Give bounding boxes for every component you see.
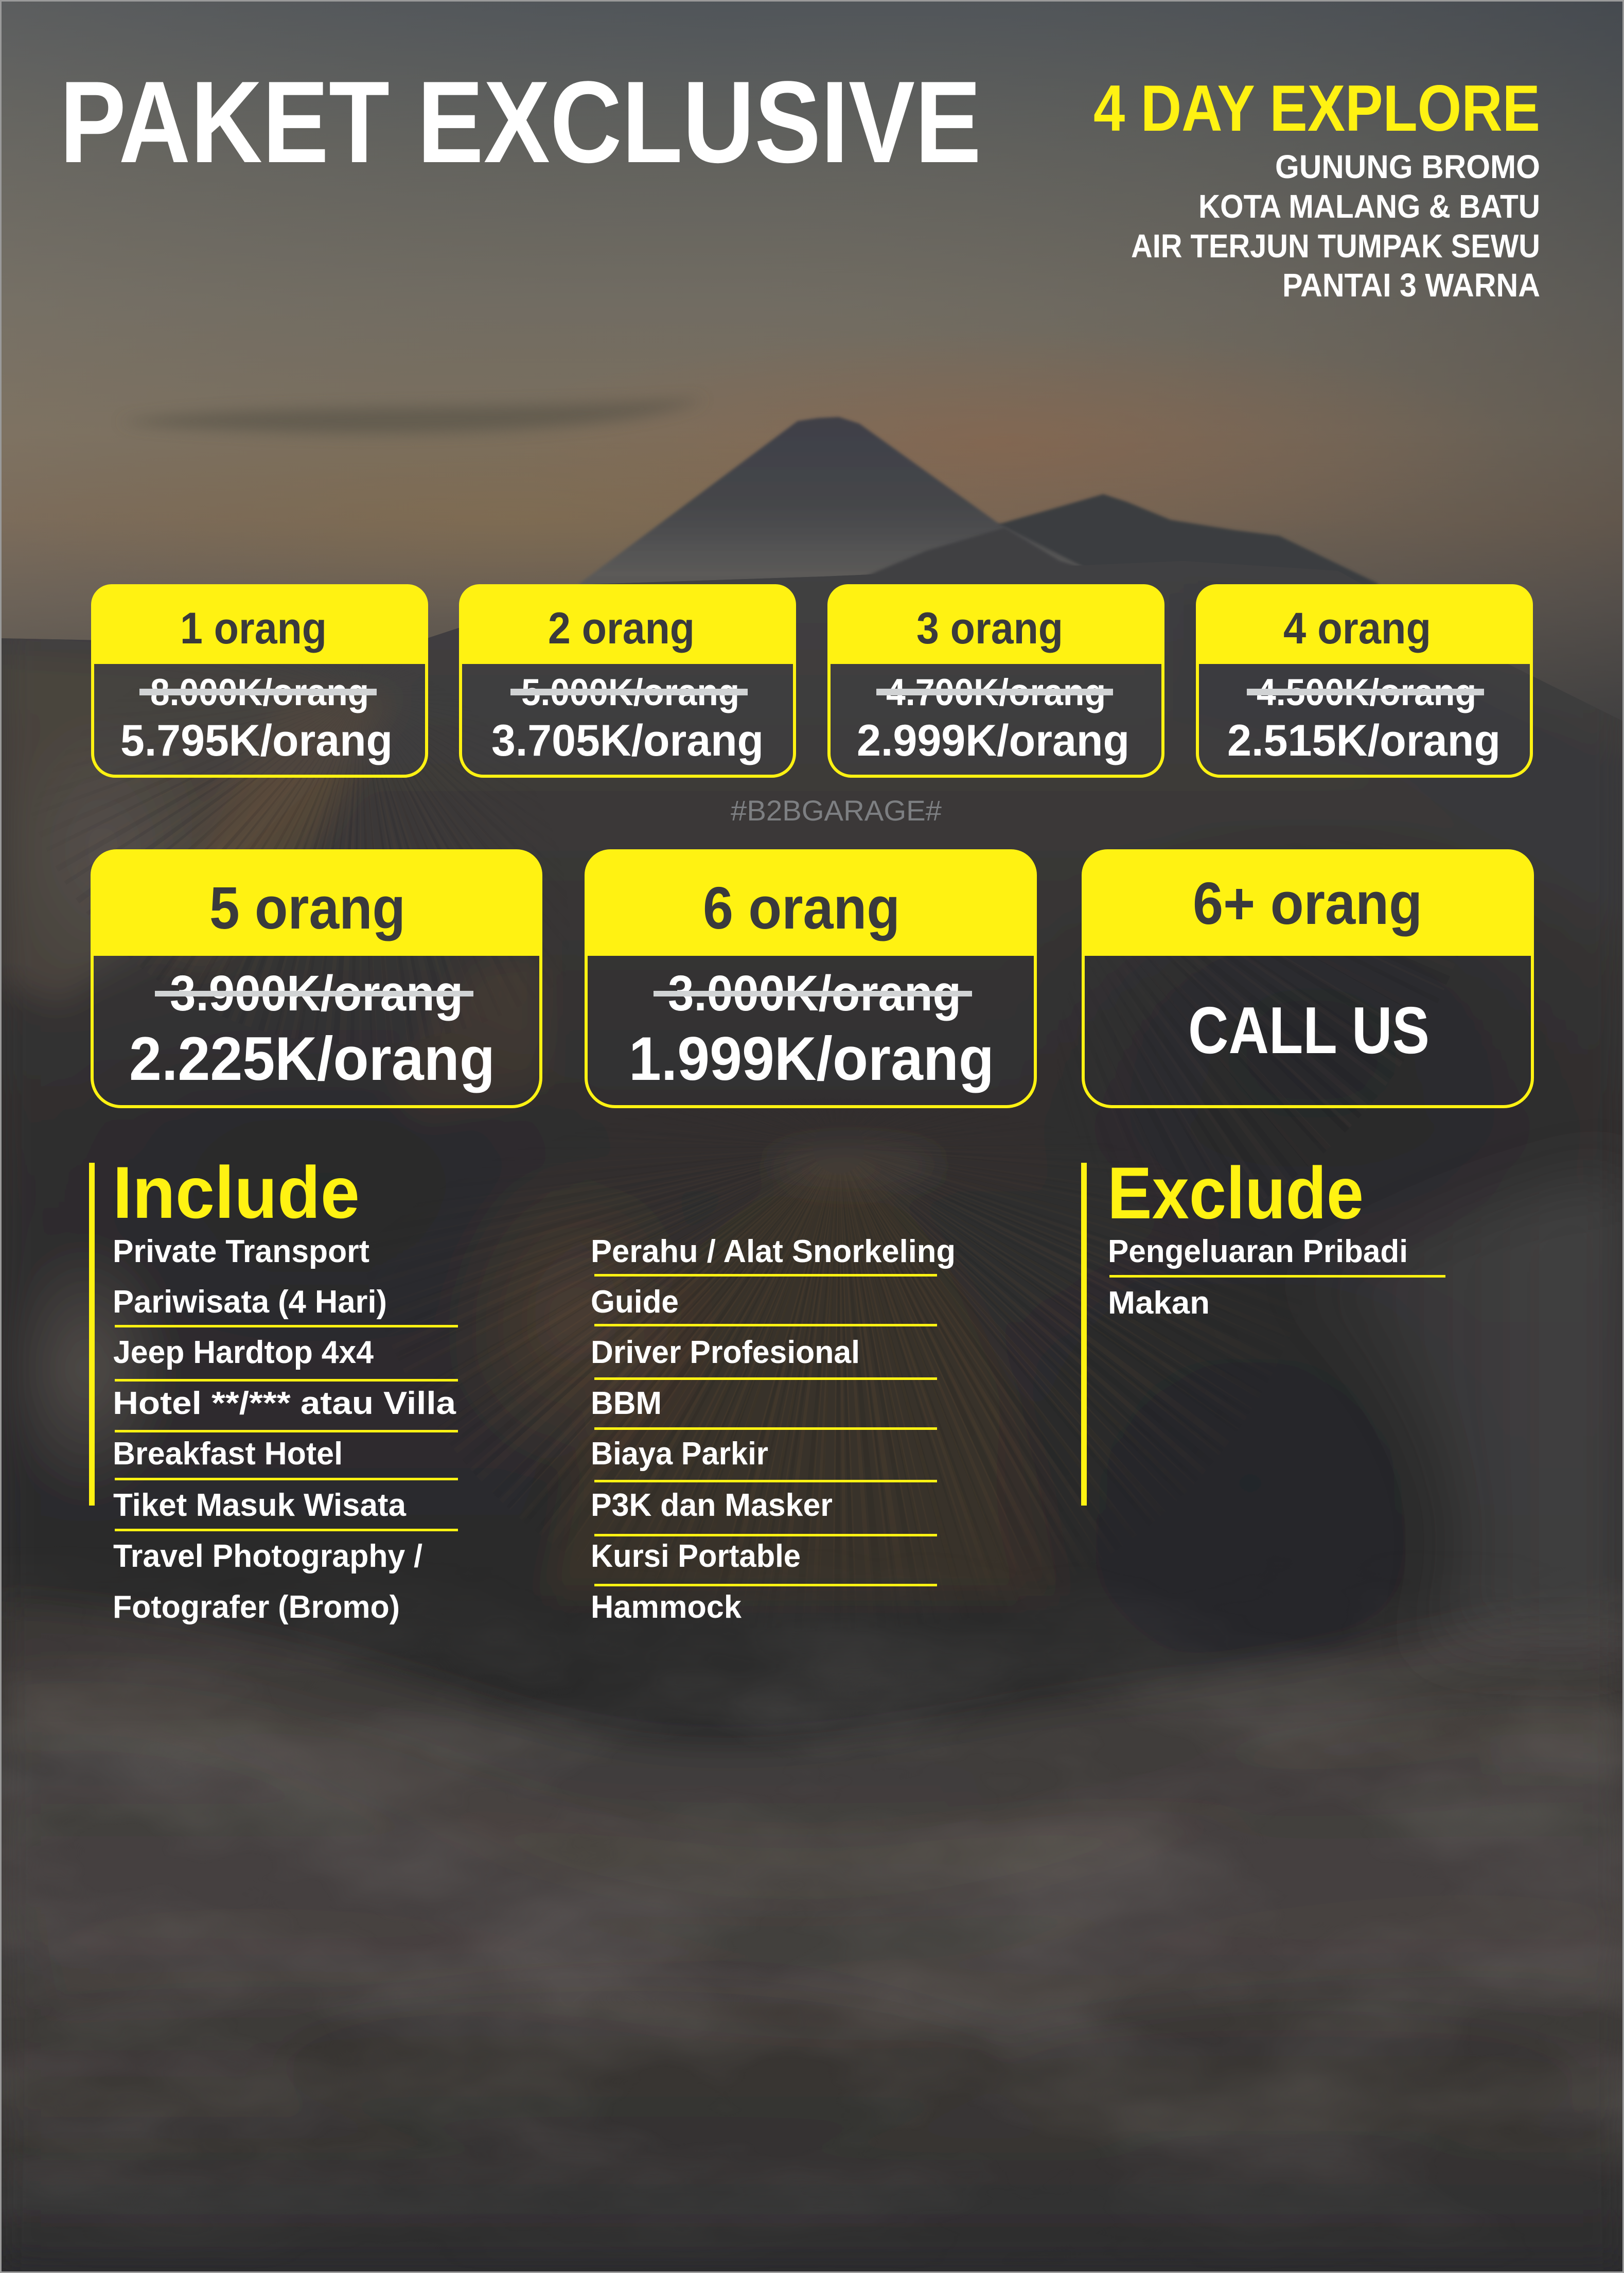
include list column 1: Jeep Hardtop 4x4 — [113, 1335, 374, 1370]
price card: 2 orang — [459, 584, 796, 776]
price card: 6 orang: 6 orang — [703, 875, 900, 941]
include list column 2: Hammock — [591, 1589, 742, 1625]
price card: 2 orang: 2 orang — [548, 604, 695, 653]
include list column 1 — [113, 1234, 458, 1625]
price card: 3 orang: 3 orang — [916, 604, 1063, 653]
include list column 1: Fotografer (Bromo) — [113, 1589, 400, 1625]
price card: 4 orang: 2.515K/orang — [1227, 716, 1501, 765]
price card: 1 orang: 8.000K/orang — [150, 672, 369, 713]
price card: 4 orang: 4 orang — [1283, 604, 1431, 653]
price card: 2 orang: 5.000K/orang — [521, 672, 739, 713]
include list column 1: Travel Photography / — [113, 1538, 422, 1574]
include list column 2: Biaya Parkir — [591, 1436, 768, 1472]
destination: Pantai 3 Warna: PANTAI 3 WARNA — [1282, 267, 1540, 304]
price card: 4 orang — [1196, 584, 1533, 776]
exclude list: Pengeluaran Pribadi — [1108, 1234, 1408, 1269]
price card: 1 orang: 1 orang — [180, 604, 327, 653]
include list column 1: Hotel **/*** atau Villa — [113, 1386, 456, 1421]
price card: 5 orang — [91, 849, 542, 1107]
include list column 2: BBM — [591, 1386, 662, 1421]
price card: 1 orang — [91, 584, 428, 776]
exclude list: Makan — [1108, 1285, 1210, 1321]
price card: 6 orang: 3.000K/orang — [668, 965, 961, 1021]
price card: 5 orang: 3.900K/orang — [170, 965, 463, 1021]
include list column 2: P3K dan Masker — [591, 1488, 833, 1523]
exclude list — [1108, 1234, 1445, 1321]
price card: 6+ orang: CALL US — [1188, 993, 1429, 1068]
price card: 4 orang: 4.500K/orang — [1257, 672, 1476, 713]
include list column 1: Private Transport — [113, 1234, 369, 1269]
price card: 5 orang: 2.225K/orang — [129, 1024, 495, 1093]
include list column 2: Kursi Portable — [591, 1538, 801, 1574]
include list column 1: Tiket Masuk Wisata — [113, 1488, 407, 1523]
price card: 2 orang: 3.705K/orang — [491, 716, 764, 765]
destination: Kota Malang and Batu: KOTA MALANG & BATU — [1198, 188, 1540, 225]
price card: 3 orang — [827, 584, 1164, 776]
itinerary block — [1093, 72, 1540, 304]
include list column 1: Pariwisata (4 Hari) — [113, 1284, 387, 1320]
price card: 6 orang — [585, 849, 1037, 1107]
panel: include — [89, 1152, 956, 1625]
price card: 6+ orang — [1082, 849, 1534, 1107]
price card: 1 orang: 5.795K/orang — [120, 716, 393, 765]
destination: Gunung Bromo: GUNUNG BROMO — [1275, 148, 1540, 185]
include list column 1: Breakfast Hotel — [113, 1436, 343, 1472]
price card: 6 orang: 1.999K/orang — [629, 1024, 994, 1093]
price card: 3 orang: 4.700K/orang — [886, 672, 1106, 713]
itinerary heading: 4 DAY EXPLORE — [1093, 72, 1540, 145]
price card: 3 orang: 2.999K/orang — [857, 716, 1129, 765]
include list column 2: Perahu / Alat Snorkeling — [591, 1234, 956, 1269]
destination: Air Terjun Tumpak Sewu: AIR TERJUN TUMPAK SEWU — [1131, 228, 1540, 265]
include list column 2: Guide — [591, 1284, 679, 1320]
watermark: #B2BGARAGE# — [731, 794, 942, 827]
price card: 5 orang: 5 orang — [209, 875, 405, 941]
include list column 2: Driver Profesional — [591, 1335, 860, 1370]
exclude heading: Exclude — [1107, 1152, 1364, 1234]
price card: 6+ orang: 6+ orang — [1193, 870, 1422, 937]
include list column 2 — [591, 1234, 956, 1625]
panel: exclude — [1081, 1152, 1445, 1506]
title: PAKET EXCLUSIVE — [60, 57, 981, 187]
include heading: Include — [113, 1152, 360, 1234]
